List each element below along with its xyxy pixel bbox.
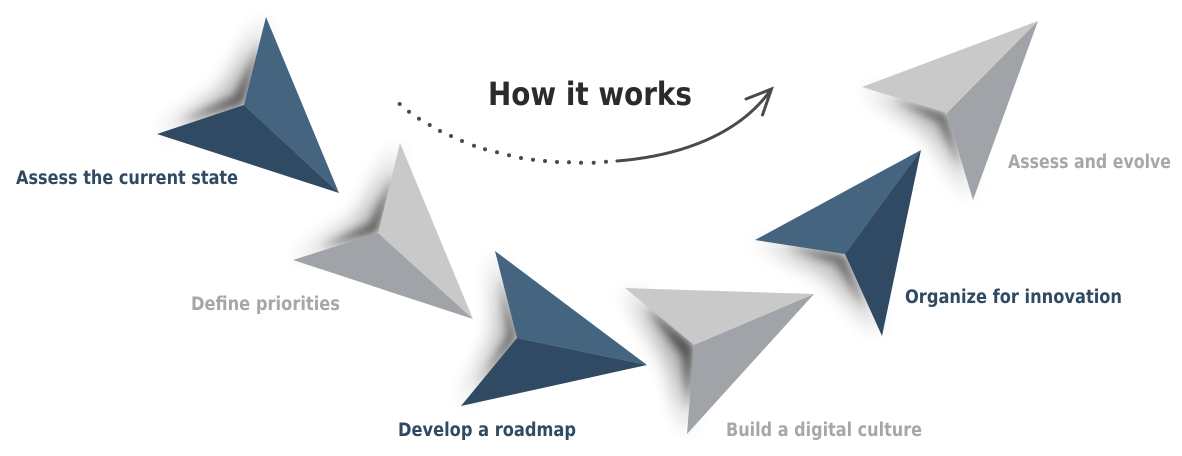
- label: build a digital culture: Build a digital culture: [726, 420, 922, 441]
- dotted path: [398, 102, 608, 165]
- plane 3: develop a roadmap: [461, 251, 647, 406]
- label: assess the current state: Assess the current state: [16, 168, 238, 189]
- plane 5: organize for innovation: [755, 150, 921, 336]
- title: How it works: [488, 75, 692, 113]
- plane 4: build a digital culture: [625, 288, 814, 434]
- label: organize for innovation: Organize for innovation: [905, 287, 1122, 308]
- label: develop a roadmap: Develop a roadmap: [398, 420, 576, 441]
- plane 2: define priorities: [293, 143, 473, 319]
- plane 1: assess the current state: [157, 17, 339, 193]
- plane 6: assess and evolve: [862, 21, 1038, 200]
- arrow: [617, 89, 772, 161]
- label: define priorities: Define priorities: [191, 294, 340, 315]
